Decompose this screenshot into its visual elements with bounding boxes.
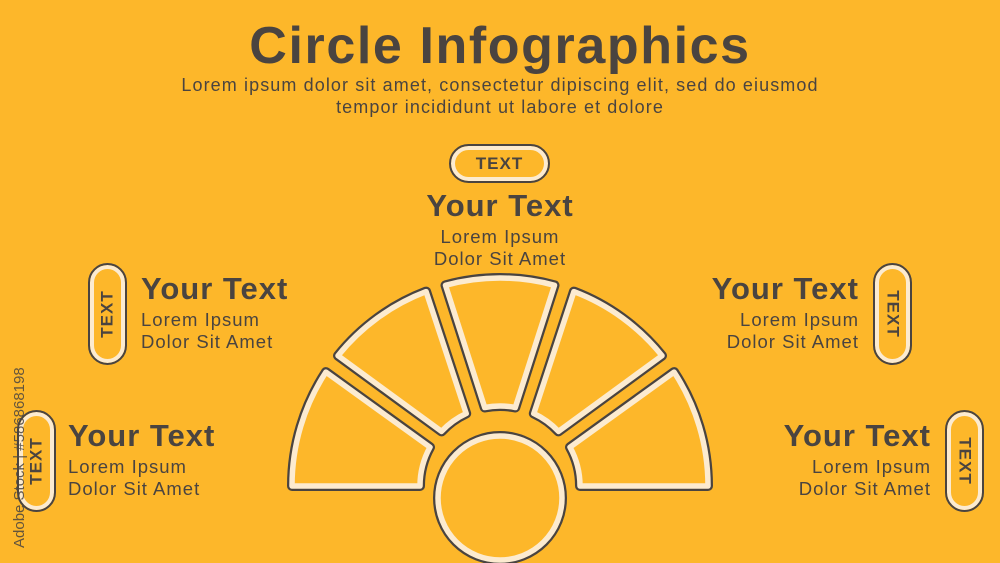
right text block 2: Lorem Ipsum <box>812 456 931 477</box>
segment 3 <box>446 278 554 408</box>
left pill 1 <box>88 263 127 365</box>
top text block: Your Text <box>426 188 574 223</box>
left pill 2 <box>17 410 56 512</box>
segment 4 <box>534 292 662 431</box>
right pill 2: TEXT <box>956 437 975 485</box>
left text block 2 <box>68 418 215 499</box>
top text block: Lorem Ipsum <box>441 226 559 247</box>
top pill: TEXT <box>476 154 523 172</box>
top text block: Dolor Sit Amet <box>434 248 566 269</box>
right pill 1: TEXT <box>884 290 903 338</box>
right text block 1: Lorem Ipsum <box>740 309 859 330</box>
left text block 2: Lorem Ipsum <box>68 456 187 477</box>
segment 2 <box>338 292 466 431</box>
center circle <box>438 436 562 560</box>
left text block 2: Your Text <box>68 418 215 453</box>
segment 5 <box>570 372 708 486</box>
right text block 2: Your Text <box>784 418 931 453</box>
left text block 1: Dolor Sit Amet <box>141 331 273 352</box>
title: Circle Infographics <box>249 17 751 75</box>
subtitle <box>181 75 819 117</box>
right text block 1: Your Text <box>712 271 859 306</box>
left pill 2: TEXT <box>27 437 46 485</box>
watermark id: Adobe Stock | #586868198 <box>11 367 28 548</box>
right pill 2 <box>945 410 984 512</box>
left text block 2: Dolor Sit Amet <box>68 478 200 499</box>
segment 1 <box>292 372 430 486</box>
right pill 1 <box>873 263 912 365</box>
right text block 1 <box>712 271 859 352</box>
top text block <box>426 188 574 269</box>
right text block 2 <box>784 418 931 499</box>
subtitle: Lorem ipsum dolor sit amet, consectetur dipiscing elit, sed do eiusmod <box>181 75 819 95</box>
right text block 1: Dolor Sit Amet <box>727 331 859 352</box>
left pill 1: TEXT <box>98 290 117 338</box>
left text block 1: Your Text <box>141 271 288 306</box>
right text block 2: Dolor Sit Amet <box>799 478 931 499</box>
subtitle: tempor incididunt ut labore et dolore <box>336 97 664 117</box>
left text block 1: Lorem Ipsum <box>141 309 260 330</box>
left text block 1 <box>141 271 288 352</box>
top pill <box>449 144 550 183</box>
